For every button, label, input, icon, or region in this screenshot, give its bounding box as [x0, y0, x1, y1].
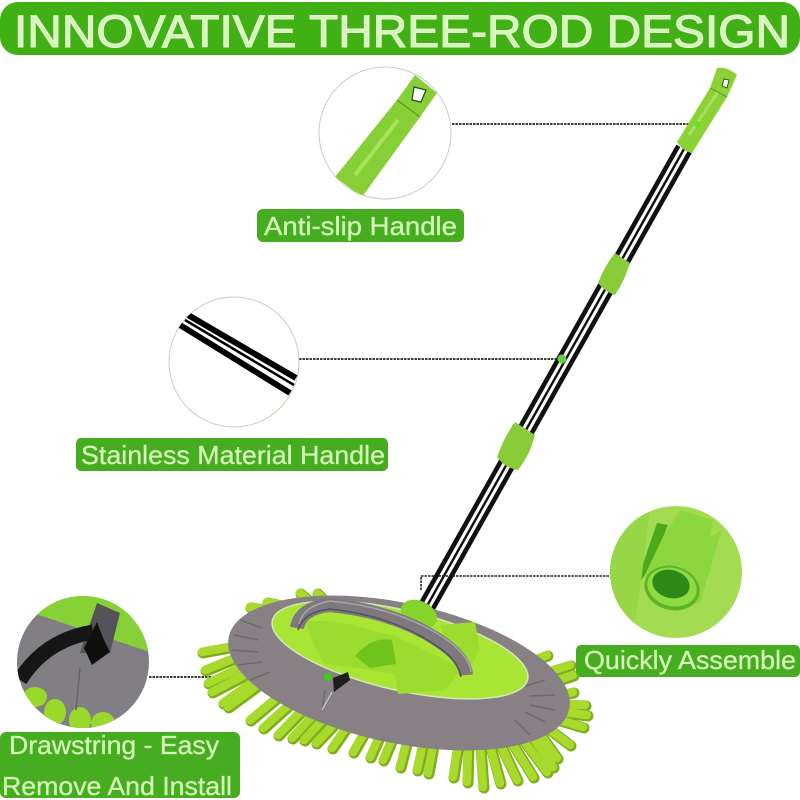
drawstring toggle [324, 672, 350, 692]
telescopic pole [421, 68, 737, 609]
raised base details [306, 621, 462, 694]
mop head [202, 568, 588, 788]
callout: quickly assemble [576, 506, 800, 677]
label: Stainless Material Handle [81, 440, 385, 470]
detail circle [169, 297, 299, 427]
label: Anti-slip Handle [264, 211, 457, 241]
label: Drawstring - Easy [9, 730, 219, 760]
leader line: drawstring [149, 676, 328, 678]
callout: drawstring [0, 596, 240, 800]
callout: stainless material handle [76, 297, 388, 471]
grip handle [677, 68, 737, 153]
cover pleats [232, 620, 555, 735]
detail circle [610, 506, 742, 640]
swivel joint [396, 594, 442, 634]
rod stripes [421, 146, 690, 609]
detail circle [319, 67, 451, 199]
title banner: INNOVATIVE THREE-ROD DESIGN [14, 6, 790, 57]
leader line: connector [421, 576, 610, 590]
leader line: handle [452, 123, 695, 125]
callout: anti-slip handle [257, 67, 464, 242]
rod marker [558, 354, 566, 364]
microfibre cover [214, 568, 584, 778]
green base plate [263, 582, 537, 718]
detail circle [17, 596, 150, 734]
label [0, 730, 240, 800]
carry handle [297, 605, 466, 675]
lower collar [497, 422, 535, 470]
cover seam [322, 692, 332, 710]
leader line: stainless rod [299, 358, 558, 360]
upper collar [598, 253, 630, 295]
chenille fringe [202, 593, 588, 788]
label: Quickly Assemble [584, 645, 796, 675]
